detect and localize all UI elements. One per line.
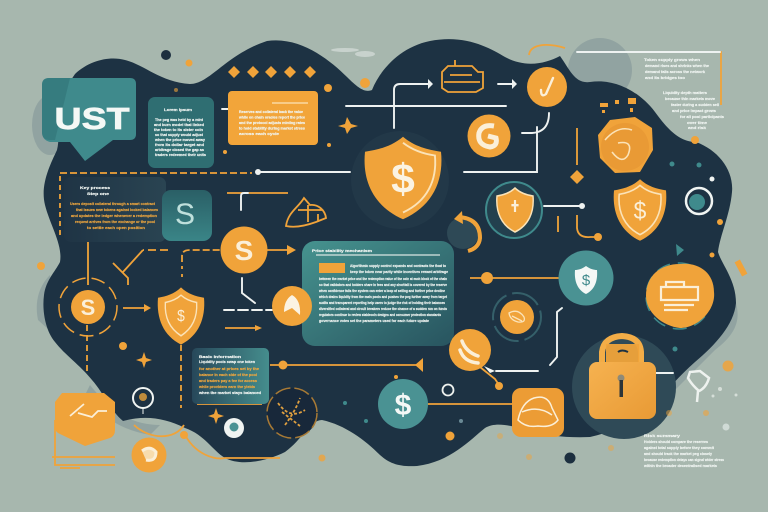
text block: top right: because thin markets move: [665, 96, 716, 101]
panel: orange text card: while on chain oracles report the price: [238, 114, 306, 120]
panel: teal text card: and burn model that linked: [154, 122, 205, 127]
panel: central teal text card: keep the token near parity while incentives reward arbitrage: [350, 269, 449, 274]
panel: teal text card: [148, 97, 214, 168]
panel: dark text card: and updates the ledger whenever a redemption: [71, 213, 158, 218]
panel: central teal text card: diversified collateral and circuit breakers reduce the chance of a sudden run on funds: [319, 306, 448, 311]
icon: white circle with teal mark: [224, 418, 244, 438]
icon: circle dollar left: S: [81, 295, 95, 320]
icon: orange hexagon badge: [55, 393, 115, 446]
icon: teal shield circle: [558, 250, 614, 306]
panel: central teal text card: so that validators and holders share in fees and any shortfall is covered by the reserve: [319, 282, 448, 287]
panel: teal text card: The peg was held by a mint: [155, 117, 204, 122]
panel: central teal text card: which drains liquidity from the main pools and pushes the peg further away from target: [318, 294, 448, 299]
icon: dollar circle: [220, 226, 268, 274]
icon: outlined ring near lock: [442, 384, 454, 396]
icon: teal dollar circle: [378, 379, 428, 429]
icon: dark scribble medallion: [267, 388, 317, 438]
panel: dark text card: request arrives from the exchange or the pool: [75, 219, 155, 224]
icon: small shield in teal ring: [486, 182, 542, 238]
icon: ringed orange circle: [493, 293, 541, 341]
text block: bottom right: Holders should compare the reserves: [644, 439, 709, 444]
icon: padlock: [589, 336, 656, 419]
panel: orange text card: across each cycle: [239, 131, 280, 136]
text block: top right: demand falls across the network: [645, 69, 706, 74]
text block: top right: faster during a sudden sell: [671, 102, 719, 107]
dark dots: [161, 50, 576, 464]
icon: main shield: $: [391, 155, 415, 202]
text block: bottom right: because redemption delays can signal wider stress: [644, 457, 725, 462]
icon: teal dollar square: [162, 190, 212, 241]
heading: UST: UST: [54, 101, 130, 136]
icon: orange circle bottom left: [132, 438, 166, 472]
panel: dark text card: Step one: [87, 191, 110, 196]
text block: top right: Liquidity depth matters: [663, 90, 708, 95]
panel: lower teal text card: and traders pay a fee for access: [199, 378, 258, 383]
icon: white ring small: [133, 388, 153, 414]
panel: teal text card: the token to its sister coin: [154, 127, 204, 132]
icon: dollar circle: S: [235, 235, 253, 266]
panel: central teal text card: Algorithmic supply control expands and contracts the float to: [350, 263, 446, 268]
icon: orange circle with white swirl: [449, 329, 495, 373]
panel: central teal text card: [302, 241, 454, 346]
icon: curved arrow: [447, 211, 480, 251]
panel: teal text card: from its dollar target and: [155, 142, 205, 147]
lock halo: [572, 335, 676, 439]
panel: orange text card: and the protocol adjusts minting rates: [239, 120, 306, 125]
text block: top right: over time: [687, 120, 708, 125]
panel: teal text card: when the price moved away: [154, 137, 206, 142]
panel: central teal text card: between the market price and the redemption value of the coin at each block of the chain: [319, 276, 447, 281]
text block: top right: and price impact grows: [672, 108, 717, 113]
UST speech bubble: [42, 78, 136, 161]
panel: central teal text card: when confidence falls the system can enter a loop of selling and further price decline: [318, 288, 446, 293]
icon: right shield: [614, 179, 666, 241]
panel: lower teal text card: when the market stays balanced: [198, 390, 262, 395]
panel: teal text card: so that supply would adjust: [155, 132, 204, 137]
text block: bottom right: against total supply before they commit: [644, 445, 715, 450]
text block: top right: demand rises and shrinks when the: [645, 63, 710, 68]
panel: teal text card: traders redeemed their units: [155, 152, 207, 157]
icon: white key outline: [688, 371, 709, 402]
icon: orange circle with cone: [272, 286, 312, 326]
icon: orange rounded square: [512, 388, 564, 437]
icon: teal dollar square: S: [175, 198, 195, 231]
text block: top right: for all pool participants: [680, 114, 725, 119]
teal and white specks: [331, 48, 738, 430]
icon: large orange stack badge: [646, 263, 714, 329]
scattered dots: [37, 60, 747, 462]
text block: top right: Token supply grows when: [644, 57, 701, 62]
central dark blob: [43, 39, 736, 466]
panel: dark text card: to settle each open position: [87, 225, 146, 230]
icon: gold outline pile: [286, 198, 326, 227]
icon: splashed orange circle: [598, 98, 653, 173]
text block: top right: [644, 57, 725, 130]
panel: lower teal text card: Liquidity pools swap one token: [199, 359, 256, 364]
icon: circle dollar left: [59, 278, 117, 336]
background smudges behind the central shape: [32, 38, 738, 435]
text block: top right: and risk: [688, 125, 707, 130]
text block: bottom right: within the broader decentralised markets: [643, 463, 718, 468]
icon: tank outline: [442, 60, 483, 92]
panel: lower teal text card: balance in each side of the pool: [199, 372, 257, 377]
decorative diamonds row: [228, 66, 316, 78]
panel: lower teal text card: Basic information: [199, 354, 242, 359]
panel: central teal text card: governance votes set the parameters used for each future update: [319, 318, 430, 323]
icon: right shield: $: [634, 197, 646, 225]
panel: lower teal text card: while providers earn the yields: [198, 384, 256, 389]
icon: teal dollar circle: $: [395, 389, 412, 422]
panel: teal text card: Lorem ipsum: [164, 107, 192, 112]
panel: orange text card: Reserves and collateral back the value: [239, 109, 304, 114]
text block: top right: and its bridges too: [645, 75, 686, 80]
halo behind main shield: [351, 131, 449, 229]
panel: dark text card: Users deposit collateral through a smart contract: [70, 201, 156, 206]
panel: dark text card: Key process: [80, 185, 111, 190]
icon: orange circle top: [527, 67, 567, 107]
text block: bottom right: and should track the market peg closely: [644, 451, 713, 456]
icon: orange circle with glyph: [468, 114, 510, 158]
panel: central teal text card: regulators continue to review stablecoin designs and consumer protection standards: [319, 312, 442, 317]
panel: central teal text card: audits and transparent reporting help users to judge the risk of holding their balances: [319, 300, 446, 305]
panel: orange text card: to hold stability during market stress: [239, 126, 306, 130]
panel: teal text card: arbitrage closed the gap as: [155, 147, 205, 152]
icon: white ring: [686, 188, 712, 214]
icon: left shield: $: [177, 308, 185, 325]
text block: bottom right: [643, 433, 725, 468]
panel: orange text card: [228, 91, 318, 145]
panel: dark text card: [64, 177, 166, 242]
panel: dark text card: that issues new tokens against locked balances: [76, 207, 159, 212]
panel: lower teal text card: for another at prices set by the: [199, 366, 260, 371]
icon: teal shield circle: $: [582, 272, 591, 289]
icon: main shield: [365, 137, 441, 219]
text block: bottom right: Risk summary: [644, 433, 681, 438]
connector lines: [52, 45, 721, 468]
panel: central teal text card: Price stability mechanism: [312, 248, 373, 253]
panel: lower teal text card: [192, 348, 269, 404]
icon: left shield: [158, 287, 204, 345]
